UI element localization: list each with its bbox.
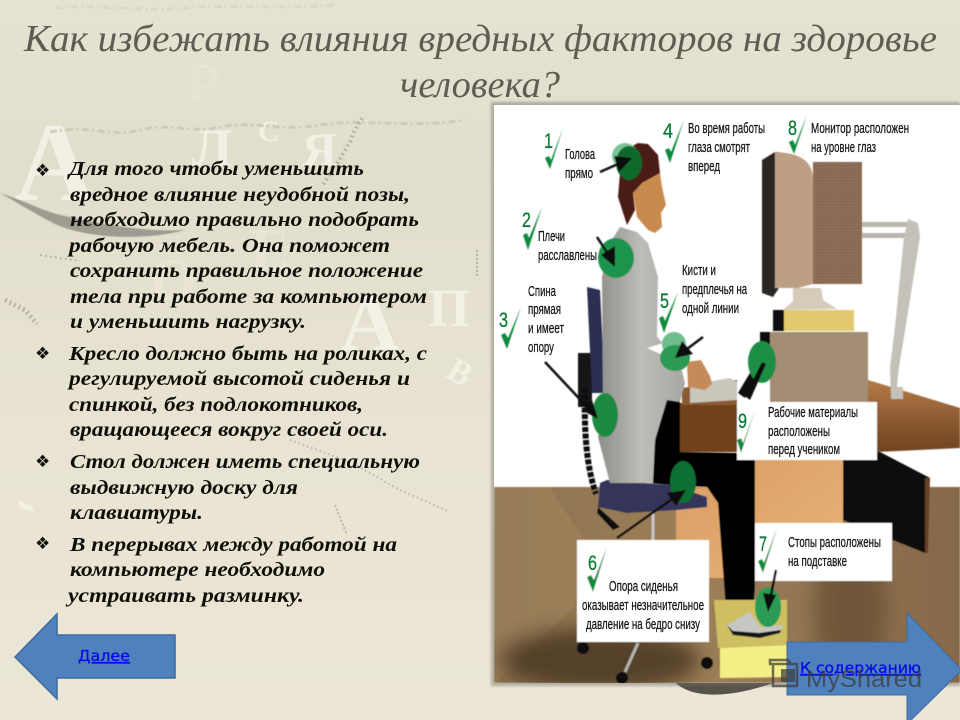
bullet 4 text: В перерывах между работой на bbox=[69, 534, 397, 556]
check numbers: 1 bbox=[544, 130, 553, 153]
bullet 2 text bbox=[35, 343, 427, 441]
background: О bbox=[150, 247, 197, 313]
button: left arrow bbox=[15, 614, 175, 699]
check marks bbox=[501, 115, 807, 592]
callout labels: расславлены bbox=[538, 247, 597, 264]
background: Е bbox=[250, 217, 290, 283]
callout labels: Плечи bbox=[538, 228, 565, 245]
background: Я bbox=[302, 124, 337, 177]
check numbers: 4 bbox=[663, 120, 673, 143]
button: left arrow: Далее bbox=[78, 647, 130, 665]
bullet 3 text: ❖ bbox=[35, 452, 50, 472]
callout labels: прямая bbox=[528, 301, 561, 318]
title: Как избежать влияния вредных факторов на здоровье bbox=[23, 18, 937, 60]
callout labels: оказывает незначительное bbox=[582, 597, 704, 614]
green zones bbox=[592, 143, 781, 627]
background: С bbox=[258, 115, 280, 148]
bullet 1 text: тела при работе за компьютером bbox=[70, 286, 427, 308]
bullet 2 text: вращающееся вокруг своей оси. bbox=[70, 419, 388, 441]
check numbers bbox=[499, 117, 797, 575]
bullet 3 text: Стол должен иметь специальную bbox=[70, 451, 420, 473]
photo: workplace illustration bbox=[491, 102, 960, 692]
title bbox=[23, 18, 937, 106]
bullet 4 text: устраивать разминку. bbox=[66, 585, 304, 607]
bullet 3 text: выдвижную доску для bbox=[70, 477, 298, 499]
floor bbox=[494, 487, 960, 683]
desk front and keyboard bbox=[679, 372, 754, 453]
background: Л bbox=[192, 118, 232, 178]
bullet 2 text: спинкой, без подлокотников, bbox=[69, 394, 363, 416]
background: А bbox=[14, 101, 95, 225]
title: человека? bbox=[400, 64, 560, 106]
callout labels: предплечья на bbox=[682, 281, 747, 298]
bullet 3 text: клавиатуры. bbox=[70, 502, 203, 524]
bullet 1 text: вредное влияние неудобной позы, bbox=[70, 184, 410, 206]
check numbers: 7 bbox=[759, 533, 767, 556]
callout labels: Кисти и bbox=[682, 262, 716, 279]
check numbers: 9 bbox=[738, 410, 747, 433]
check numbers: 3 bbox=[499, 309, 508, 332]
callout labels: глаза смотрят bbox=[688, 139, 750, 156]
button: right arrow bbox=[787, 613, 960, 720]
legs bbox=[650, 395, 755, 623]
text block: recommendations bbox=[35, 158, 427, 607]
callout labels: Опора сиденья bbox=[609, 578, 678, 595]
bullet 4 text: компьютере необходимо bbox=[70, 559, 325, 581]
bullet 2 text: ❖ bbox=[35, 344, 50, 364]
bullet 1 text: рабочую мебель. Она поможет bbox=[67, 235, 390, 257]
background: Р bbox=[186, 53, 220, 115]
lamp bbox=[862, 219, 920, 399]
callout labels: Голова bbox=[565, 146, 595, 163]
background: А bbox=[340, 277, 399, 368]
callout labels: Спина bbox=[528, 283, 556, 300]
bullet 2 text: регулируемой высотой сиденья и bbox=[67, 368, 410, 390]
bullet 1 text bbox=[35, 158, 427, 333]
chair bbox=[577, 287, 713, 684]
check numbers: 5 bbox=[660, 290, 669, 313]
bullet 3 text bbox=[35, 451, 420, 524]
decorative shadow under image bbox=[673, 680, 773, 695]
bullet 1 text: сохранить правильное положение bbox=[70, 260, 423, 282]
bullet 1 text: Для того чтобы уменьшить bbox=[67, 158, 364, 180]
background: П bbox=[428, 278, 470, 338]
callout labels: Монитор расположен bbox=[811, 120, 909, 137]
callout labels: расположены bbox=[768, 423, 830, 440]
scene bbox=[494, 115, 960, 692]
callout labels: Рабочие материалы bbox=[768, 404, 858, 421]
pointer arrows bbox=[545, 156, 703, 538]
bullet 1 text: ❖ bbox=[35, 161, 50, 181]
callout labels: перед учеником bbox=[768, 441, 840, 458]
check numbers: 8 bbox=[788, 117, 797, 140]
callout labels: Стопы расположены bbox=[788, 534, 881, 551]
bullet 4 text: ❖ bbox=[35, 534, 50, 554]
background: В bbox=[441, 351, 479, 394]
bullet 4 text bbox=[35, 534, 397, 607]
button: right arrow: К содержанию bbox=[800, 659, 921, 677]
white callouts bbox=[737, 402, 877, 460]
check numbers: 2 bbox=[522, 209, 531, 232]
bullet 2 text: Кресло должно быть на роликах, с bbox=[68, 343, 427, 365]
callout labels: прямо bbox=[565, 165, 593, 182]
callout labels: одной линии bbox=[682, 300, 739, 317]
callout labels: на уровне глаз bbox=[811, 139, 876, 156]
check numbers: 6 bbox=[588, 552, 597, 575]
monitor bbox=[760, 152, 868, 402]
desk bbox=[676, 380, 960, 578]
callout labels: опору bbox=[528, 339, 554, 356]
bullet 1 text: и уменьшить нагрузку. bbox=[70, 311, 306, 333]
callout labels bbox=[528, 120, 909, 633]
callout labels: на подставке bbox=[788, 553, 847, 570]
footrest and shoe bbox=[714, 600, 788, 678]
callout labels: вперед bbox=[688, 158, 720, 175]
callout labels: давление на бедро снизу bbox=[586, 616, 700, 633]
bullet 1 text: необходимо правильно подобрать bbox=[70, 209, 419, 231]
callout labels: и имеет bbox=[528, 320, 564, 337]
callout labels: Во время работы bbox=[688, 120, 765, 137]
man bbox=[598, 143, 712, 483]
watermark: MyShared bbox=[806, 666, 922, 693]
watermark bbox=[770, 660, 922, 693]
